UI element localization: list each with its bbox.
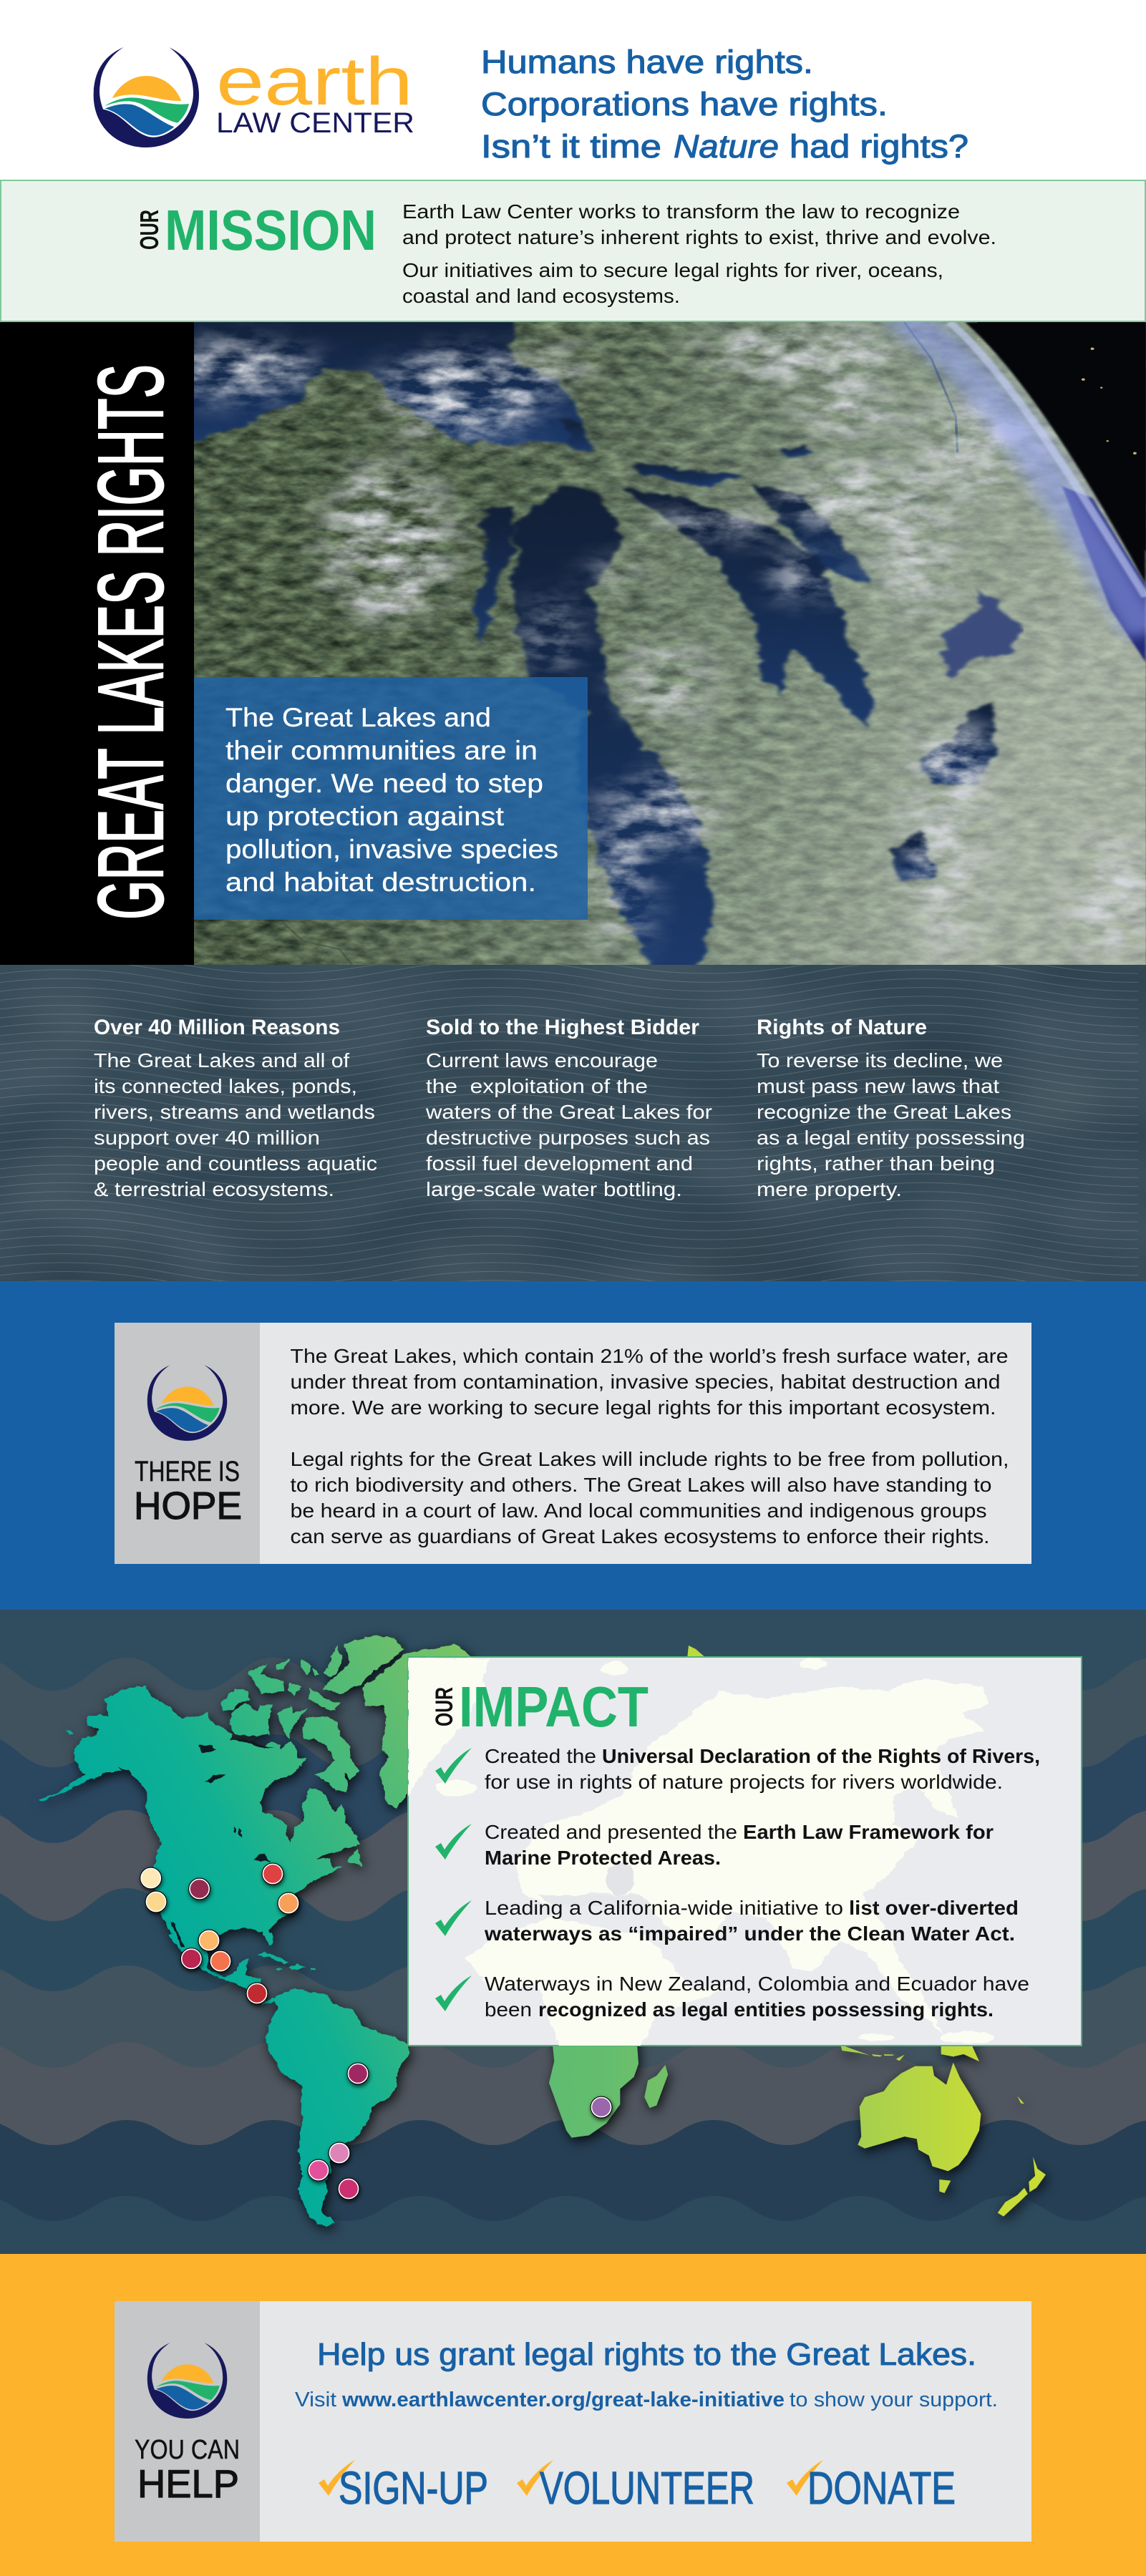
text: hope body: under threat from contamination, invasive species, habitat destruction and xyxy=(291,1371,1001,1393)
text: mission statement: Our initiatives aim to secure legal rights for river, oceans, xyxy=(402,259,943,281)
callout: danger statement: danger. We need to step xyxy=(225,769,543,798)
action: donate xyxy=(787,2460,956,2514)
section: blue there is hope band xyxy=(0,1281,1146,1610)
callout: danger statement: pollution, invasive species xyxy=(225,835,558,864)
action: sign-up: SIGN-UP xyxy=(339,2462,488,2514)
map pins xyxy=(140,1862,612,2200)
text column: Rights of Nature: recognize the Great Lakes xyxy=(757,1101,1011,1123)
impact item: legal entities: Waterways in New Zealand, Colombia and Ecuador have xyxy=(485,1973,1029,1995)
text: hope body: Legal rights for the Great Lakes will include rights to be free from pollution, xyxy=(291,1448,1009,1470)
heading: our impact: OUR xyxy=(431,1687,458,1726)
heading: our impact: IMPACT xyxy=(459,1675,649,1739)
text column: Over 40 Million Reasons: The Great Lakes and all of xyxy=(94,1049,349,1071)
panel: you can help badge: YOU CAN xyxy=(135,2435,240,2465)
panel: there is hope badge xyxy=(115,1323,260,1564)
text column: Rights of Nature: as a legal entity possessing xyxy=(757,1127,1025,1149)
impact item: Earth Law Framework: Marine Protected Areas. xyxy=(485,1847,721,1869)
text: hope body xyxy=(291,1345,1009,1547)
text column: Rights of Nature: To reverse its decline, we xyxy=(757,1049,1003,1071)
panel: there is hope badge: THERE IS xyxy=(135,1456,240,1487)
heading: our mission: OUR xyxy=(135,210,164,250)
logo: Earth Law Center xyxy=(94,44,414,147)
section: wave bands background xyxy=(0,1610,1146,2305)
impact item: Earth Law Framework xyxy=(435,1821,994,1869)
header background xyxy=(0,0,1146,180)
action: volunteer xyxy=(517,2460,754,2514)
text: mission statement: Earth Law Center works to transform the law to recognize xyxy=(402,200,960,223)
panel: you can help badge xyxy=(115,2301,260,2542)
headline: tagline: Nature xyxy=(674,128,779,165)
callout: danger statement: and habitat destruction. xyxy=(225,867,536,897)
text column: Sold to the Highest Bidder: fossil fuel development and xyxy=(426,1152,693,1175)
text: mission statement: and protect nature’s inherent rights to exist, thrive and evolve. xyxy=(402,226,996,248)
text: hope body: to rich biodiversity and others. The Great Lakes will also have standing to xyxy=(291,1474,992,1496)
text column: Sold to the Highest Bidder: waters of the Great Lakes for xyxy=(425,1101,712,1123)
impact item: Universal Declaration: for use in rights of nature projects for rivers worldwide. xyxy=(485,1771,1003,1793)
text column: Sold to the Highest Bidder xyxy=(425,1016,712,1200)
headline: tagline: Humans have rights. xyxy=(481,44,813,80)
panel: reasons over wave texture xyxy=(0,952,1146,1302)
callout: danger statement: The Great Lakes and xyxy=(225,703,491,732)
panel: our mission xyxy=(1,180,1145,321)
map: North America and Arctic islands xyxy=(39,1635,474,1961)
impact item: Universal Declaration: Created the xyxy=(485,1745,596,1767)
text column: Rights of Nature xyxy=(757,1016,1025,1200)
text column: Over 40 Million Reasons: & terrestrial ecosystems. xyxy=(94,1178,334,1200)
panel: our impact xyxy=(408,1657,1082,2051)
impact item: California initiative: waterways as “impaired” under the Clean Water Act. xyxy=(484,1923,1015,1945)
map: Greenland xyxy=(363,1644,474,1808)
text: website link: to show your support. xyxy=(790,2388,998,2411)
panel: title sidebar xyxy=(0,322,194,965)
map: Arctic Russia tip above panel xyxy=(687,1646,707,1659)
photo: Great Lakes from space xyxy=(157,306,1146,978)
text column: Sold to the Highest Bidder: large-scale water bottling. xyxy=(426,1178,682,1200)
callout: danger statement xyxy=(194,677,588,920)
impact item: Earth Law Framework: Earth Law Framework for xyxy=(743,1821,994,1843)
text column: Over 40 Million Reasons: people and countless aquatic xyxy=(94,1152,377,1175)
action: sign-up xyxy=(319,2460,488,2514)
text column: Sold to the Highest Bidder: the exploitation of the xyxy=(426,1075,648,1097)
text: mission statement xyxy=(402,200,996,307)
text: mission statement: coastal and land ecosystems. xyxy=(402,285,680,307)
text: hope body: more. We are working to secure legal rights for this important ecosystem. xyxy=(291,1396,996,1419)
text: hope body: The Great Lakes, which contain 21% of the world’s fresh surface water, are xyxy=(291,1345,1008,1367)
headline: tagline: had rights? xyxy=(790,128,968,165)
panel: you can help badge: HELP xyxy=(137,2461,239,2506)
callout: danger statement: their communities are in xyxy=(225,736,538,765)
impact item: legal entities: been xyxy=(485,1998,532,2021)
heading: our mission: MISSION xyxy=(165,198,377,262)
map: Africa, Madagascar, Australia, New Zealand xyxy=(549,2026,1046,2217)
text: website link: www.earthlawcenter.org/great-lake-initiative xyxy=(341,2388,785,2411)
impact item: Universal Declaration: Universal Declaration of the Rights of Rivers, xyxy=(602,1745,1040,1767)
impact item: California initiative: list over-diverted xyxy=(849,1897,1019,1919)
logo: Earth Law Center: earth xyxy=(216,44,413,120)
impact item: Earth Law Framework: Created and presented the xyxy=(485,1821,737,1843)
text: website link xyxy=(295,2388,998,2411)
text: website link: Visit xyxy=(295,2388,336,2411)
text column: Sold to the Highest Bidder: Current laws encourage xyxy=(426,1049,658,1071)
action: donate: DONATE xyxy=(807,2462,956,2514)
headline: tagline xyxy=(481,44,968,165)
panel: there is hope badge: HOPE xyxy=(134,1484,242,1527)
text column: Sold to the Highest Bidder: destructive purposes such as xyxy=(426,1127,710,1149)
map: pale continents behind impact text xyxy=(408,1658,994,2051)
text column: Rights of Nature: rights, rather than being xyxy=(757,1152,995,1175)
map: Central and South America xyxy=(168,1933,409,2227)
text column: Rights of Nature: must pass new laws that xyxy=(757,1075,999,1097)
text column: Rights of Nature: Rights of Nature xyxy=(757,1016,927,1039)
heading: call to action: Help us grant legal rights to the Great Lakes. xyxy=(317,2337,976,2372)
action: volunteer: VOLUNTEER xyxy=(540,2462,754,2514)
section: you can help xyxy=(0,2254,1146,2576)
text column: Over 40 Million Reasons xyxy=(94,1016,377,1200)
text column: Over 40 Million Reasons: support over 40 million xyxy=(94,1127,320,1149)
text: hope body: be heard in a court of law. And local communities and indigenous groups xyxy=(291,1500,986,1522)
impact item: legal entities: recognized as legal entities possessing rights. xyxy=(538,1998,994,2021)
impact item: California initiative xyxy=(435,1897,1019,1945)
impact item: Universal Declaration xyxy=(435,1745,1040,1793)
text: hope body: can serve as guardians of Great Lakes ecosystems to enforce their rights. xyxy=(291,1525,989,1547)
impact item: legal entities xyxy=(435,1973,1029,2021)
logo: Earth Law Center: LAW CENTER xyxy=(216,107,414,139)
text column: Over 40 Million Reasons: rivers, streams and wetlands xyxy=(94,1101,375,1123)
text column: Rights of Nature: mere property. xyxy=(757,1178,902,1200)
text column: Over 40 Million Reasons: its connected lakes, ponds, xyxy=(94,1075,357,1097)
callout: danger statement: up protection against xyxy=(225,802,505,831)
map: world continents xyxy=(39,1635,1046,2227)
text column: Over 40 Million Reasons: Over 40 Million Reasons xyxy=(94,1016,340,1039)
headline: tagline: Isn’t it time xyxy=(481,128,661,165)
impact item: California initiative: Leading a California-wide initiative to xyxy=(485,1897,843,1919)
headline: tagline: Corporations have rights. xyxy=(481,86,888,122)
text column: Sold to the Highest Bidder: Sold to the Highest Bidder xyxy=(426,1016,699,1039)
